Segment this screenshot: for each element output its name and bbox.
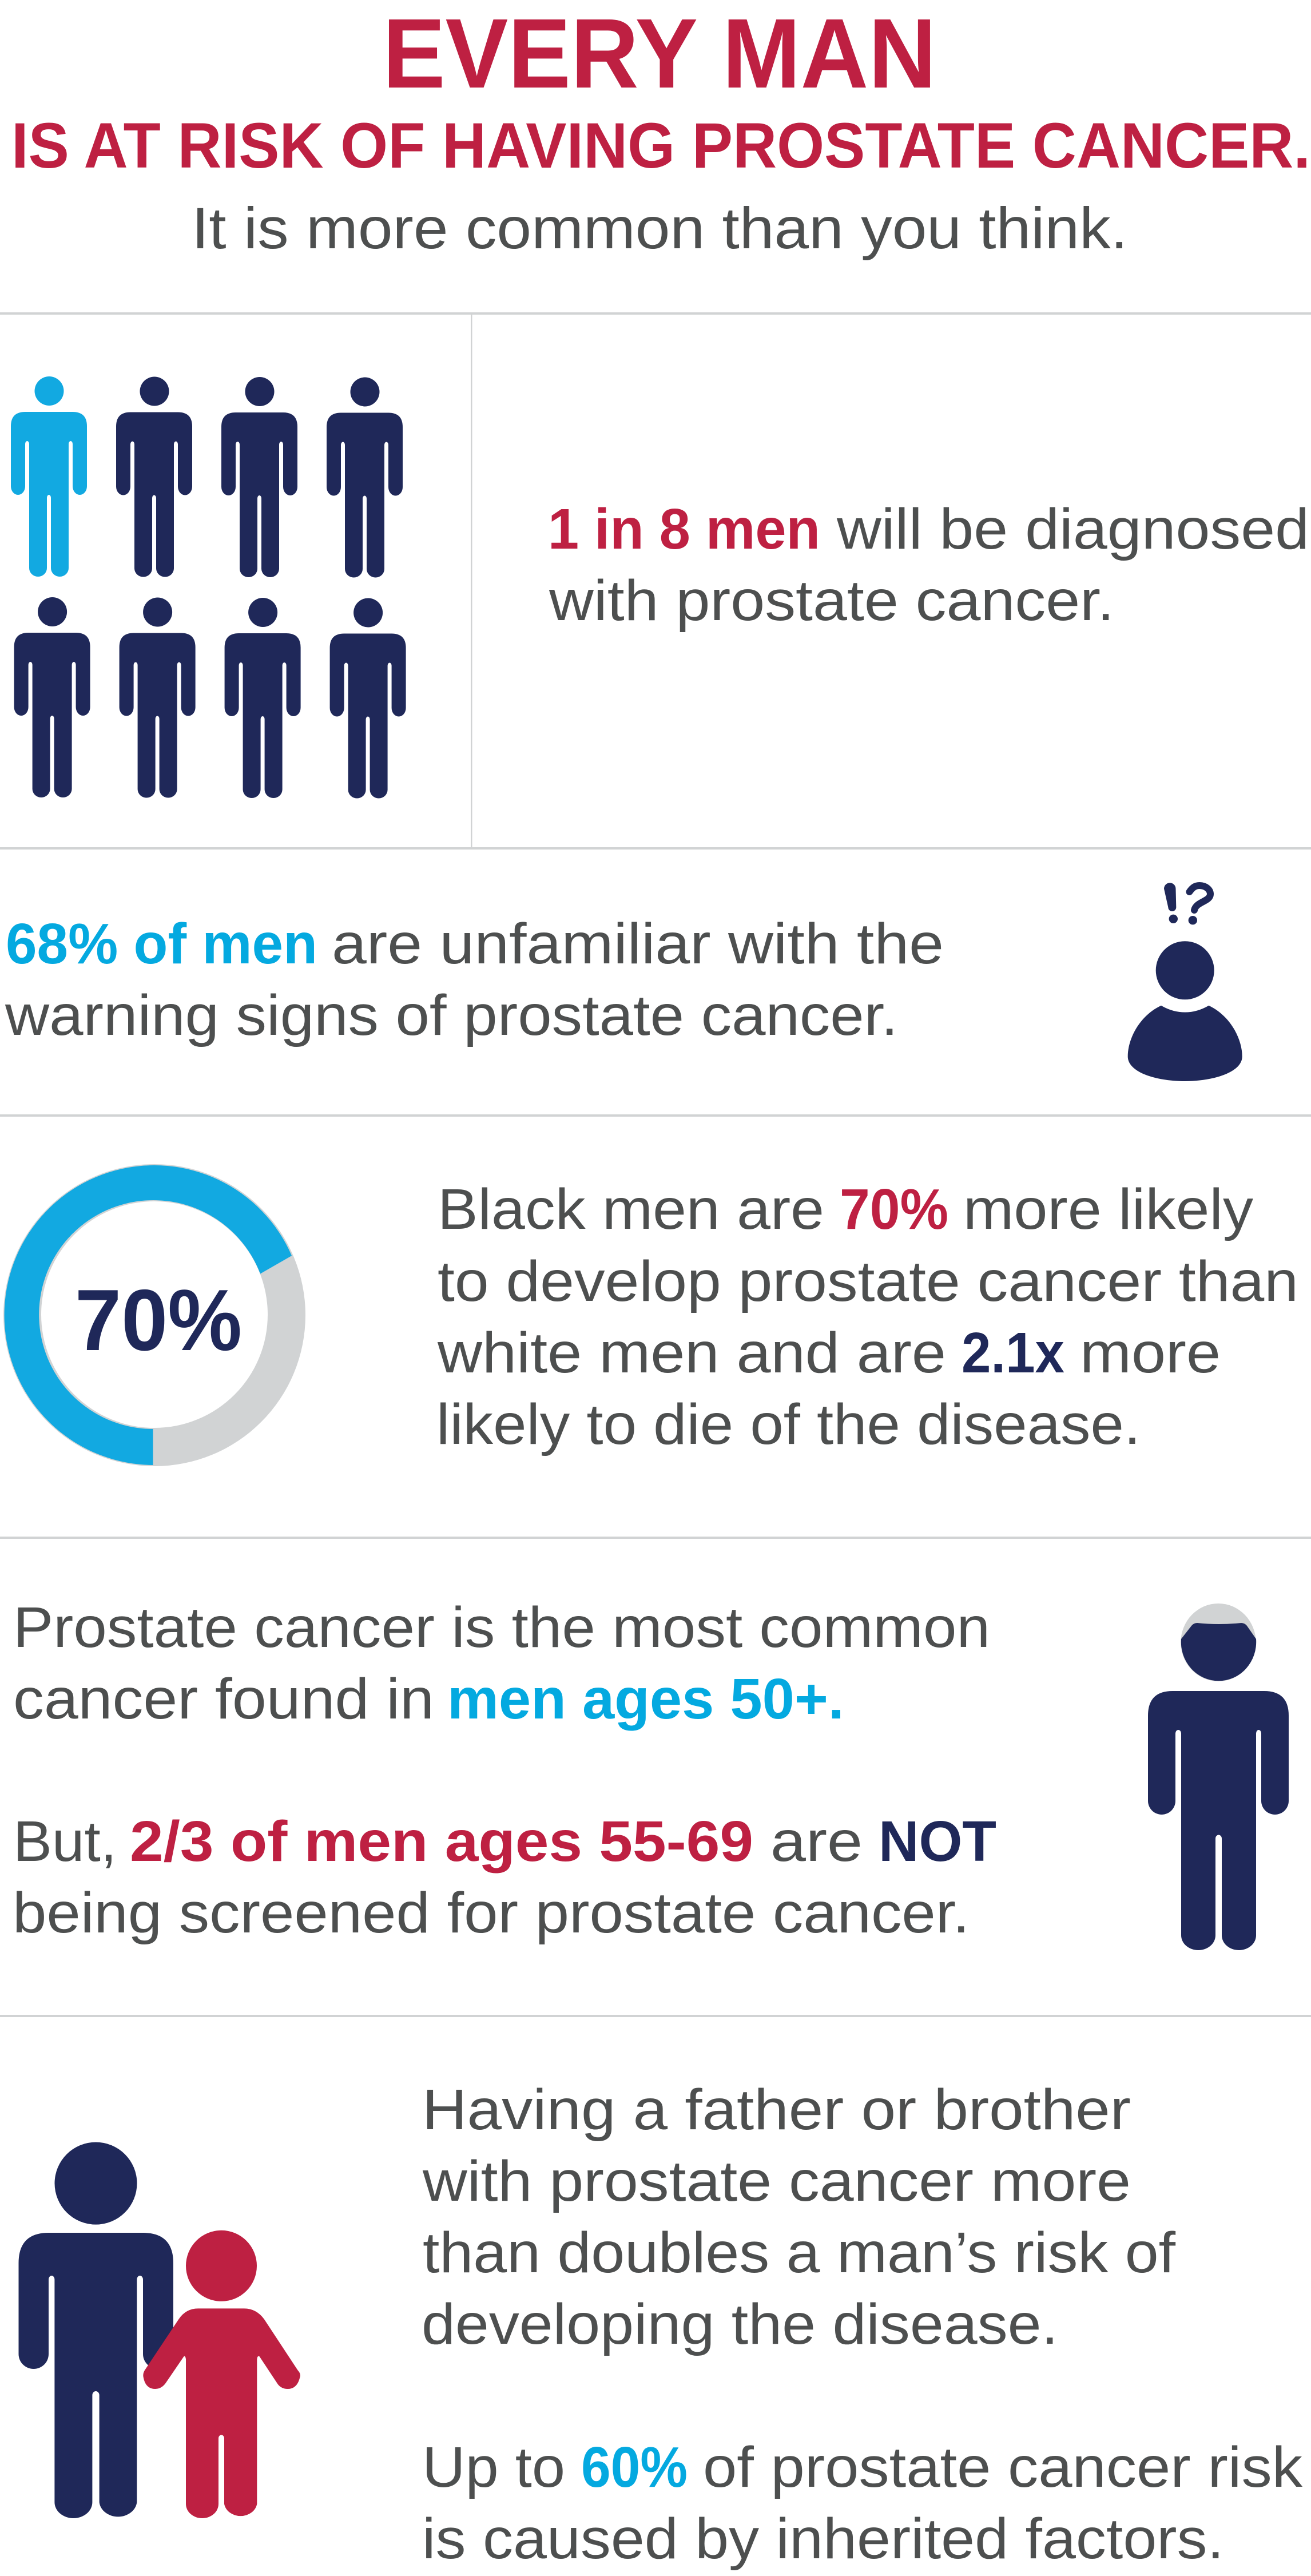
- text block: most common cancer: men ages 50+.: [447, 1667, 844, 1731]
- person 6: [120, 597, 196, 797]
- text block: 68% of men: are unfamiliar with the: [332, 912, 944, 976]
- title: every man: EVERY MAN: [383, 0, 936, 109]
- person 7: [225, 598, 301, 798]
- text block: inherited factors: [422, 2435, 1303, 2571]
- text block: not being screened: being screened for prostate cancer.: [13, 1881, 970, 1945]
- text block: black men: to develop prostate cancer than: [438, 1249, 1298, 1313]
- text block: not being screened: 2/3 of men ages 55-69: [130, 1809, 753, 1874]
- text block: inherited factors: of prostate cancer risk: [703, 2435, 1303, 2499]
- panel: men ages 50+: [13, 1595, 1289, 1950]
- person 5: [14, 597, 90, 797]
- panel: black men 70 percent: [3, 1164, 1298, 1466]
- panel: family history: [18, 2078, 1303, 2571]
- text block: black men: Black men are: [438, 1177, 824, 1241]
- text block: 68% of men: [5, 912, 944, 1047]
- panel: 1 in 8 men: [11, 376, 1309, 799]
- text block: inherited factors: Up to: [422, 2435, 565, 2499]
- subheading: It is more common than you think.: [192, 196, 1128, 261]
- icon: eight people, one highlighted: [11, 376, 406, 799]
- text block: father or brother: with prostate cancer more: [422, 2149, 1131, 2213]
- text block: not being screened: are: [770, 1809, 863, 1874]
- text block: 68% of men: warning signs of prostate cancer.: [5, 983, 898, 1047]
- text block: black men: likely to die of the disease.: [436, 1392, 1141, 1456]
- child figure: [143, 2230, 300, 2518]
- person 2: [116, 376, 192, 577]
- person 3: [221, 377, 297, 577]
- person 8: [330, 598, 406, 799]
- panel: 68 percent of men: [5, 883, 1242, 1081]
- text block: father or brother: [422, 2078, 1175, 2356]
- icon: father and child: [18, 2142, 300, 2518]
- text block: 1 in 8 men: [548, 497, 1309, 633]
- icon: older man with gray hair: [1148, 1603, 1289, 1950]
- text block: father or brother: than doubles a man’s risk of: [423, 2221, 1175, 2285]
- text block: not being screened: But,: [13, 1809, 117, 1874]
- text block: black men: [436, 1177, 1298, 1456]
- text block: black men: more: [1080, 1321, 1221, 1385]
- text block: black men: white men and are: [437, 1321, 946, 1385]
- icon: person with question mark: [1128, 883, 1242, 1081]
- text block: 68% of men: 68% of men: [6, 912, 317, 976]
- text block: black men: 2.1x: [962, 1321, 1064, 1385]
- text block: not being screened: [13, 1809, 996, 1945]
- text block: black men: more likely: [963, 1177, 1253, 1241]
- chart: donut 70%: [3, 1164, 305, 1466]
- text block: inherited factors: is caused by inherited factors.: [422, 2507, 1224, 2571]
- text block: 1 in 8 men: will be diagnosed: [836, 497, 1309, 561]
- text block: most common cancer: [13, 1595, 990, 1731]
- text block: most common cancer: Prostate cancer is the most common: [13, 1595, 990, 1660]
- text block: father or brother: Having a father or brother: [422, 2078, 1131, 2142]
- chart: donut 70%: 70%: [75, 1272, 242, 1369]
- panel: header: [11, 0, 1310, 261]
- text block: inherited factors: 60%: [581, 2435, 688, 2499]
- person 1 highlighted: [11, 376, 87, 577]
- father figure: [18, 2142, 173, 2518]
- text block: father or brother: developing the disease.: [422, 2292, 1058, 2356]
- text block: not being screened: NOT: [879, 1809, 996, 1874]
- text block: 1 in 8 men: with prostate cancer.: [549, 569, 1114, 633]
- person 4: [327, 378, 403, 578]
- text block: most common cancer: cancer found in: [13, 1667, 434, 1731]
- text block: black men: 70%: [840, 1177, 948, 1241]
- text block: 1 in 8 men: 1 in 8 men: [548, 497, 820, 561]
